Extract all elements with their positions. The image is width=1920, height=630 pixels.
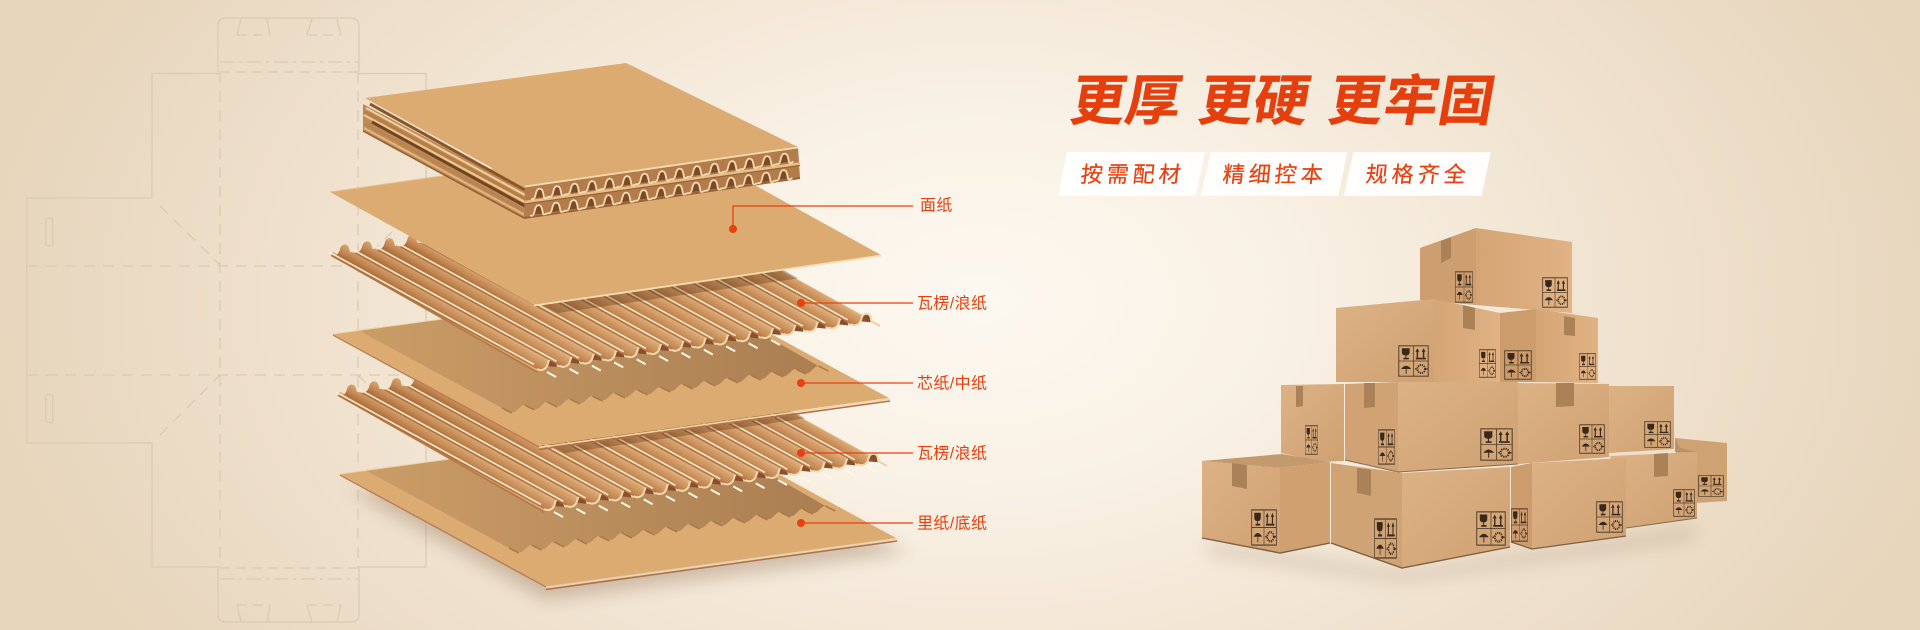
box: lower center right <box>1511 458 1626 549</box>
box: far right <box>1675 438 1727 504</box>
title <box>1066 70 1500 132</box>
callout: 面纸 <box>729 196 953 233</box>
callout: 瓦楞/浪纸 upper <box>797 294 987 312</box>
ground shadow <box>1205 525 1700 582</box>
box die-line drawing <box>27 18 426 622</box>
callout: 瓦楞/浪纸 lower <box>797 444 987 462</box>
face sheet <box>330 142 881 306</box>
tag: 精细控本 <box>1201 152 1347 196</box>
box: third row far right <box>1609 386 1674 453</box>
callout: 面纸: 面纸 <box>920 196 953 214</box>
callout: 里纸/底纸: 里纸/底纸 <box>917 514 987 532</box>
title: 更厚 <box>1066 70 1187 132</box>
tag: 规格齐全 <box>1344 152 1491 196</box>
box: third row far left <box>1281 384 1344 462</box>
box: third row center <box>1345 382 1518 472</box>
box stack <box>1202 228 1727 582</box>
box: lower center <box>1331 463 1510 568</box>
callout: 瓦楞/浪纸 lower: 瓦楞/浪纸 <box>917 444 987 462</box>
callout: 芯纸/中纸 <box>797 374 987 392</box>
tag: 按需配材 <box>1058 152 1205 196</box>
box: top <box>1420 228 1572 313</box>
core sheet with upper flute layer <box>329 200 905 450</box>
assembled corrugated board <box>363 63 800 218</box>
box: second row left <box>1336 299 1500 382</box>
title: 更硬 <box>1194 70 1315 132</box>
box: second row right <box>1500 309 1598 383</box>
title: 更牢固 <box>1324 70 1500 132</box>
bottom sheet with lower flute layer <box>336 340 912 590</box>
callout: 芯纸/中纸: 芯纸/中纸 <box>917 374 987 392</box>
soft shadow under bottom sheet <box>350 470 910 600</box>
box: third row center right <box>1518 383 1609 464</box>
box: lower left <box>1202 454 1330 553</box>
tag: 精细控本: 精细控本 <box>1221 162 1328 187</box>
callout: 里纸/底纸 <box>797 514 987 532</box>
callout: 瓦楞/浪纸 upper: 瓦楞/浪纸 <box>917 294 987 312</box>
box: lower right <box>1610 452 1697 528</box>
tag: 规格齐全: 规格齐全 <box>1364 162 1471 187</box>
tag: 按需配材: 按需配材 <box>1079 162 1186 187</box>
